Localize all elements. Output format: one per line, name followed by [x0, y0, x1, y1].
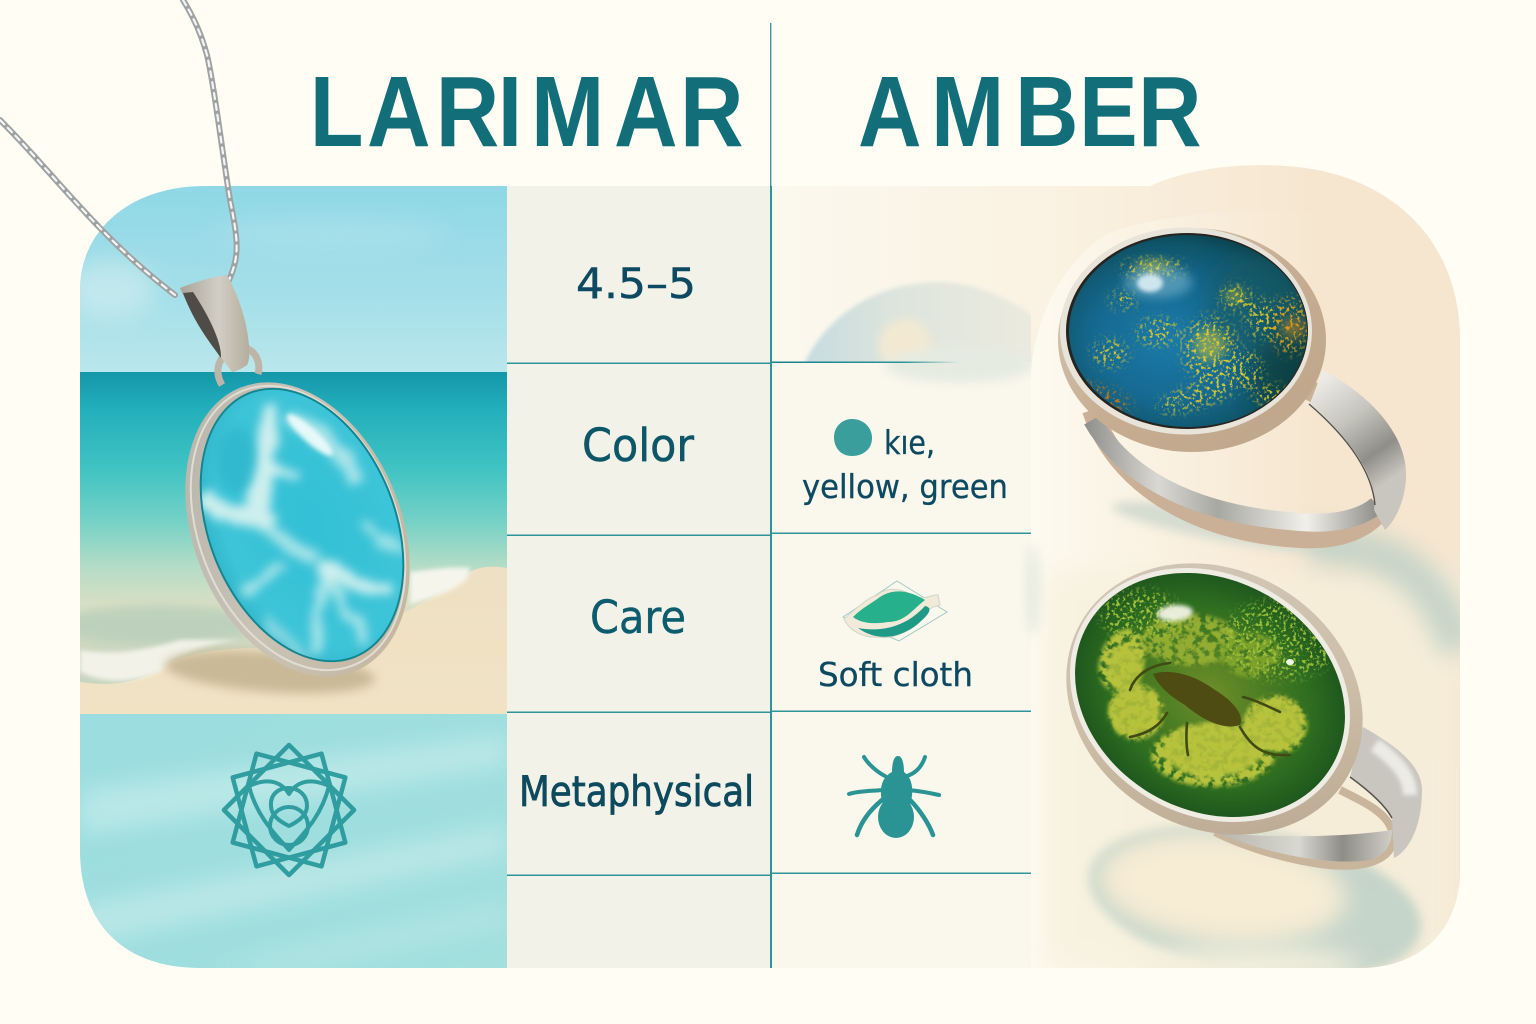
icon: insect	[849, 756, 939, 838]
pendant bail	[180, 275, 249, 372]
pendant stone	[185, 382, 410, 676]
sand	[80, 567, 507, 714]
ring: blue amber	[1058, 228, 1406, 538]
lower amber column background	[1001, 376, 1031, 968]
title: LARIMAR: LARIMAR	[310, 56, 744, 167]
icon: teal colour dot	[834, 419, 872, 456]
foam	[410, 567, 470, 604]
green ring stone	[1030, 525, 1390, 865]
table grid lines	[507, 186, 1031, 968]
label: Care: Care	[590, 591, 686, 644]
text: colour value line 1: kıe,	[884, 423, 935, 462]
hazy dome in amber column	[804, 281, 1031, 362]
pendant jump ring	[218, 347, 259, 385]
blue ring bezel	[1058, 228, 1326, 452]
sea	[80, 372, 507, 702]
label: Metaphysical: Metaphysical	[519, 767, 754, 816]
label: Color: Color	[582, 419, 694, 472]
wet sand shade	[80, 603, 244, 646]
panel: amber backdrop	[800, 165, 1460, 968]
chakra symbol	[224, 745, 354, 875]
green ring band	[1215, 790, 1393, 866]
icon: soft cloth	[843, 581, 947, 641]
label: hardness value: 4.5–5	[576, 259, 696, 308]
necklace chain	[0, 0, 237, 295]
text: colour value line 2: yellow, green	[802, 467, 1008, 506]
pendant	[180, 275, 410, 676]
trapped insect	[1130, 663, 1290, 755]
title: AMBER: AMBER	[858, 56, 1202, 167]
panel: larimar photo	[60, 186, 507, 968]
header divider	[770, 23, 771, 186]
sky	[80, 186, 507, 373]
blue ring band	[1092, 388, 1392, 538]
lower teal panel	[80, 714, 507, 968]
green ring bezel	[1017, 510, 1412, 888]
ring: green amber	[1066, 563, 1422, 870]
panel: centre column	[507, 186, 770, 968]
blue ring stone	[1069, 235, 1307, 427]
text: Soft cloth: Soft cloth	[818, 655, 973, 694]
pendant shadow	[164, 645, 376, 699]
amber photo area	[1025, 211, 1470, 1002]
